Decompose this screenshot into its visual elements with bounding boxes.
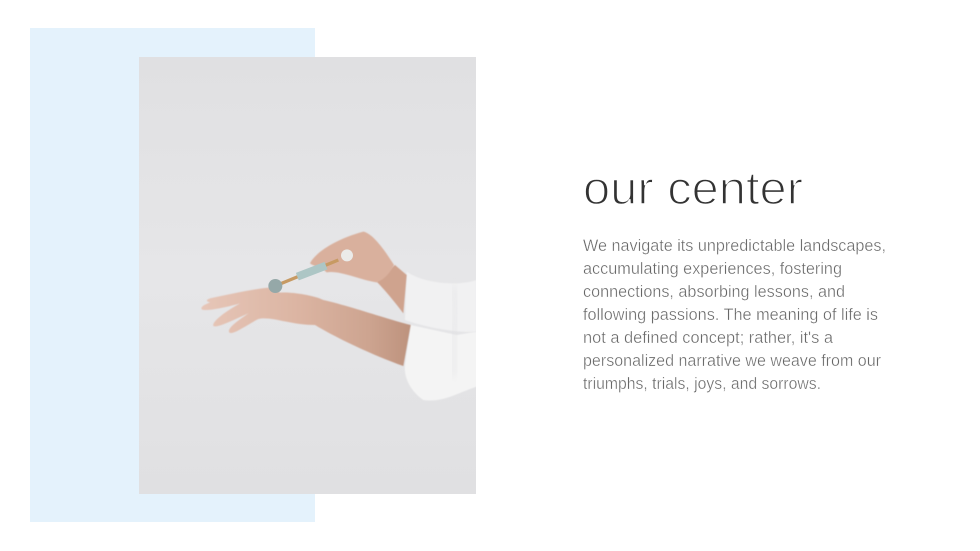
photo: hands with facial roller bbox=[139, 57, 477, 494]
body text: following passions. The meaning of life is bbox=[583, 306, 878, 324]
sleeve fold shading bbox=[453, 287, 456, 377]
lower hand and forearm bbox=[201, 288, 411, 366]
roller bbox=[268, 249, 353, 293]
body text bbox=[583, 237, 886, 393]
slide bbox=[30, 28, 884, 522]
upper forearm bbox=[377, 265, 407, 313]
body text: personalized narrative we weave from our bbox=[583, 352, 881, 370]
body text: not a defined concept; rather, it's a bbox=[583, 329, 834, 347]
lower sleeve bbox=[405, 325, 477, 400]
body text: triumphs, trials, joys, and sorrows. bbox=[583, 375, 821, 393]
body text: accumulating experiences, fostering bbox=[583, 260, 842, 278]
title: our center bbox=[583, 162, 803, 214]
body text: connections, absorbing lessons, and bbox=[583, 283, 845, 301]
body text: We navigate its unpredictable landscapes, bbox=[583, 237, 886, 255]
panel: pale blue backdrop bbox=[30, 28, 315, 522]
upper sleeve bbox=[405, 272, 477, 332]
upper hand bbox=[310, 232, 394, 282]
